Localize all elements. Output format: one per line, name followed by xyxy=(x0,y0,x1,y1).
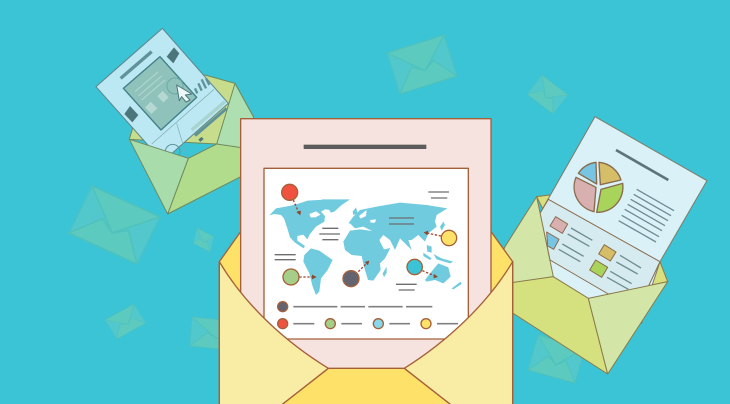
map markers xyxy=(282,184,457,287)
legend xyxy=(278,302,458,329)
world map xyxy=(269,199,462,295)
envelope bottom xyxy=(495,277,608,374)
eurasia xyxy=(348,203,447,250)
envelope left flap xyxy=(129,139,188,214)
background envelope: top center xyxy=(387,35,457,94)
africa xyxy=(343,229,390,281)
envelope left flap xyxy=(495,197,553,287)
envelope bottom center xyxy=(279,368,453,404)
envelope back xyxy=(129,75,253,144)
envelope bottom xyxy=(168,144,280,214)
background envelope: small top right xyxy=(527,75,568,114)
australia xyxy=(425,263,451,283)
legend lines xyxy=(559,228,641,289)
background envelope: lower left xyxy=(105,304,146,339)
envelope right flap xyxy=(588,282,668,374)
data band xyxy=(540,199,660,294)
camera icons xyxy=(167,47,179,63)
background envelope: tiny xyxy=(193,228,214,252)
greenland xyxy=(322,199,350,213)
envelope left flap xyxy=(219,262,328,404)
legend squares xyxy=(550,217,568,233)
background envelope: large left xyxy=(69,186,160,264)
web page panel xyxy=(123,57,197,130)
document: dashboard page xyxy=(96,28,228,162)
lower section dividers xyxy=(152,89,214,157)
map panel xyxy=(264,168,468,339)
dashed arrows xyxy=(293,200,441,277)
title bar xyxy=(121,52,152,78)
text lines xyxy=(619,189,674,242)
right green envelope with document xyxy=(495,117,707,374)
left green envelope with document xyxy=(96,28,280,214)
sheet title bar xyxy=(304,145,426,149)
south america xyxy=(303,248,333,295)
background envelope: lower center xyxy=(190,317,242,351)
document sheet xyxy=(241,119,491,392)
islands xyxy=(423,253,432,260)
report title xyxy=(616,150,668,180)
envelope right flap xyxy=(404,262,513,404)
document: pie chart report xyxy=(530,117,707,323)
chart bars xyxy=(192,102,225,130)
map gaps xyxy=(309,210,376,223)
envelope back xyxy=(219,232,513,404)
bar icons xyxy=(195,78,209,93)
envelope back xyxy=(537,195,668,298)
main yellow envelope xyxy=(219,119,513,404)
cursor xyxy=(177,85,192,102)
map annotation lines xyxy=(275,192,449,290)
background envelope: bottom right xyxy=(528,335,585,383)
pie chart xyxy=(574,162,623,212)
north america xyxy=(269,199,331,248)
envelope right flap xyxy=(217,83,260,153)
